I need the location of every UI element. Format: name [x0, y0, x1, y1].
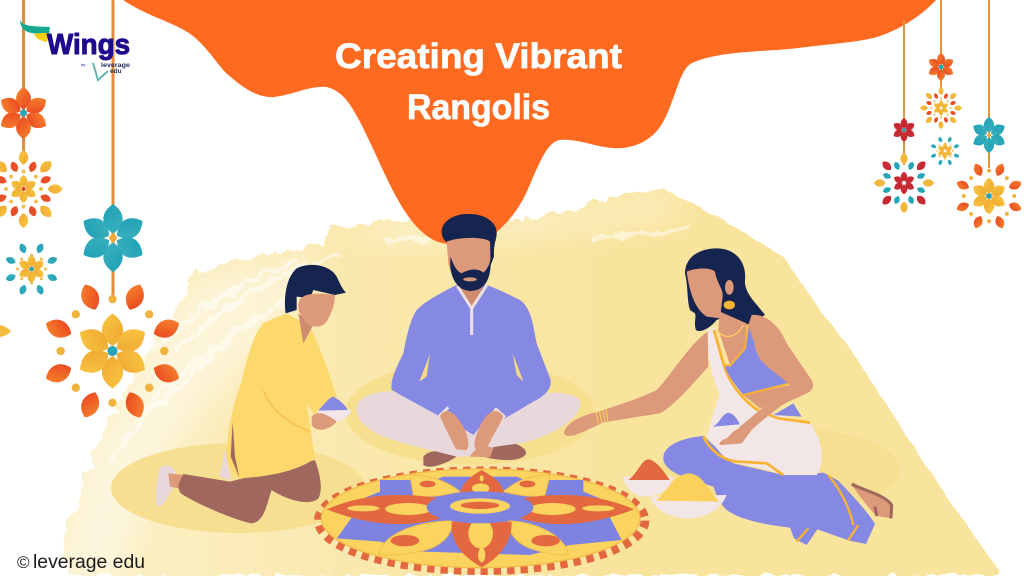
- icon: orange rosette: [0, 150, 62, 228]
- right hanging decorations: [874, 0, 1024, 242]
- title: [335, 37, 622, 127]
- icon: right teal flower: [971, 117, 1007, 153]
- icon: crimson flower: [892, 118, 916, 142]
- person: seated woman: [564, 248, 892, 545]
- rangoli yellow base: [321, 469, 640, 568]
- icon: large flower: [18, 257, 207, 445]
- icon: right large flower: [943, 150, 1024, 242]
- rangoli scalloped edge: [318, 471, 645, 571]
- rangoli red petals: [327, 495, 440, 524]
- logo: Wings by leverage edu: [20, 19, 130, 80]
- orange title blob: [123, 0, 936, 245]
- icon: small teal rosette: [925, 131, 965, 171]
- red powder bowl: [623, 459, 673, 497]
- footer credit: ©: [17, 553, 30, 572]
- footer credit: leverage edu: [33, 552, 145, 573]
- logo: Wings by leverage edu: edu: [110, 68, 122, 75]
- logo: Wings by leverage edu: Wings: [47, 29, 130, 61]
- rangoli yellow petals: [379, 475, 568, 555]
- rangoli center: [427, 491, 533, 523]
- rangoli purple ground: [337, 477, 622, 555]
- icon: teal rosette: [0, 233, 68, 305]
- icon: small orange rosette: [920, 87, 962, 129]
- left hanging decorations: [0, 0, 207, 445]
- rangoli: [318, 469, 645, 571]
- person: kneeling boy: [156, 265, 352, 523]
- person: seated man: [356, 214, 580, 467]
- yellow powder bowl: [650, 473, 727, 518]
- title: Creating Vibrant: [335, 37, 622, 76]
- icon: red flower: [0, 87, 50, 139]
- logo: Wings by leverage edu: by: [81, 62, 85, 67]
- icon: teal flower: [79, 204, 147, 272]
- yellow powder wash background: [60, 190, 1000, 576]
- logo: Wings by leverage edu: leverage: [101, 62, 130, 69]
- icon: small red flower: [927, 53, 955, 81]
- icon: crimson rosette: [874, 153, 934, 213]
- title: Rangolis: [407, 88, 550, 127]
- icon: partial petal: [0, 325, 11, 337]
